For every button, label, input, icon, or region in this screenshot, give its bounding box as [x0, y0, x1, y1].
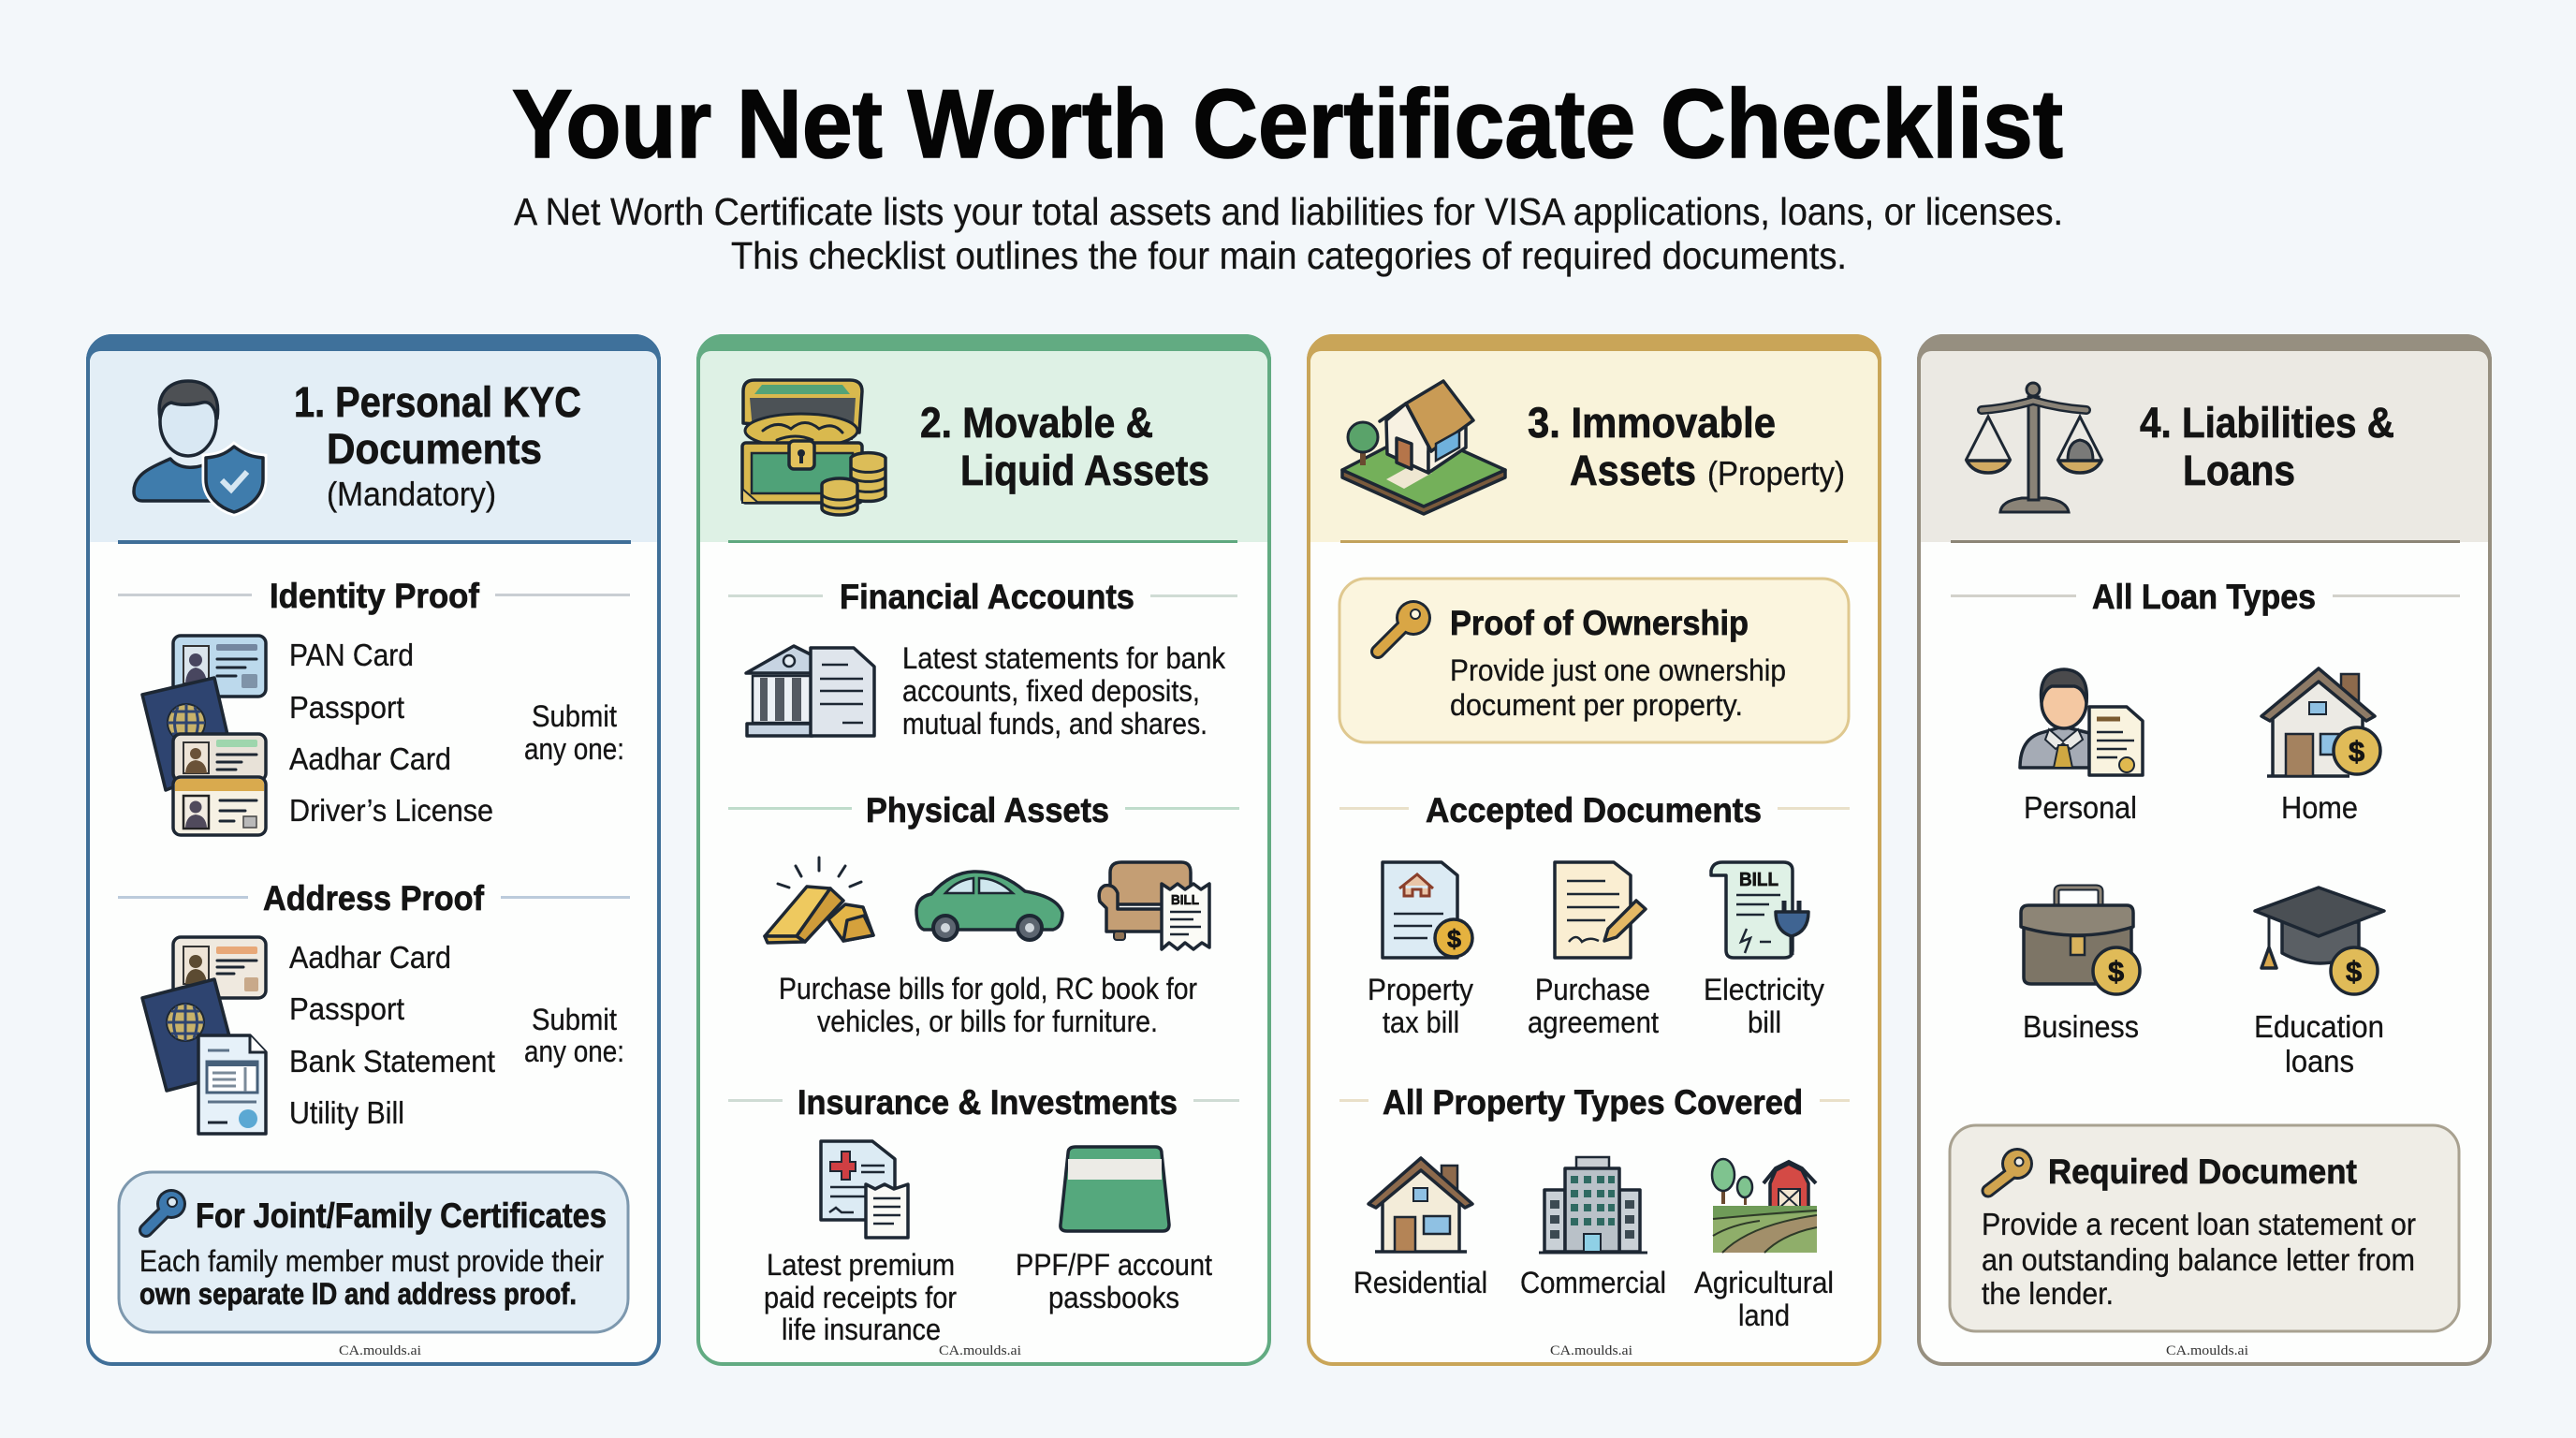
callout: proof of ownership: document per property.: [1450, 688, 1743, 722]
label: land: [1738, 1299, 1790, 1332]
label: Electricity: [1704, 973, 1824, 1006]
label: [1694, 1266, 1834, 1332]
callout: proof of ownership: [1339, 579, 1849, 742]
watermark: CA.moulds.ai: [2166, 1343, 2248, 1358]
heading: [920, 399, 1209, 494]
section heading: Accepted Documents: Accepted Documents: [1426, 791, 1762, 829]
heading: [1528, 399, 1845, 494]
panel: 4. Liabilities and Loans: [1917, 334, 2492, 1364]
watermark: CA.moulds.ai: [1550, 1343, 1632, 1358]
heading: Documents: [327, 425, 542, 473]
callout: proof of ownership: Proof of Ownership: [1450, 604, 1749, 642]
label: agreement: [1528, 1005, 1659, 1039]
icon: business loan: $: [2108, 955, 2124, 988]
icon: education loan: [2255, 888, 2384, 994]
label: Business: [2023, 1009, 2139, 1044]
section heading: All Loan Types: All Loan Types: [2092, 578, 2316, 616]
heading: 2. Movable &: [920, 399, 1153, 447]
label: Personal: [2024, 790, 2137, 825]
icon: blue key: [146, 1189, 186, 1230]
section heading: Identity Proof: Identity Proof: [270, 577, 480, 615]
identity proof list: [289, 638, 493, 828]
address proof list: Passport: [289, 991, 404, 1026]
heading: Assets: [1570, 447, 1696, 494]
label: Home: [2281, 790, 2358, 825]
label: Property: [1368, 973, 1473, 1006]
heading: (Property): [1707, 454, 1845, 492]
address proof list: Bank Statement: [289, 1044, 495, 1078]
insurance label: paid receipts for: [764, 1281, 957, 1314]
icon: agricultural land: [1712, 1159, 1817, 1253]
icon: residential: [1368, 1158, 1472, 1252]
label: loans: [2285, 1044, 2354, 1078]
note: submit any one: Submit: [532, 1003, 617, 1036]
icon: electricity bill: [1711, 862, 1808, 958]
icon: gold bars: [765, 858, 873, 943]
icon: electricity bill: BILL: [1739, 870, 1778, 890]
callout: required document: an outstanding balance letter from: [1982, 1242, 2415, 1277]
label: Commercial: [1520, 1266, 1666, 1299]
label: Education: [2254, 1009, 2384, 1044]
heading: [2140, 399, 2394, 494]
callout: required document: Provide a recent loan statement or: [1982, 1207, 2416, 1241]
physical assets description: [779, 972, 1197, 1038]
section heading: Financial Accounts: Financial Accounts: [840, 578, 1134, 616]
callout: required document: [1950, 1125, 2459, 1331]
icon: purchase agreement: [1555, 862, 1646, 958]
panel: 1. Personal KYC Documents: [86, 334, 661, 1364]
passbook label: passbooks: [1048, 1281, 1179, 1314]
icon: personal loan: [2020, 669, 2143, 775]
identity proof list: PAN Card: [289, 638, 414, 672]
address proof list: Aadhar Card: [289, 940, 451, 975]
icon: sofa with bill: BILL: [1171, 892, 1199, 908]
icon: person with shield: [134, 381, 263, 512]
section heading: Insurance and Investments: Insurance & Investments: [798, 1083, 1178, 1122]
icon: property tax bill: [1383, 862, 1472, 958]
passbook label: PPF/PF account: [1016, 1248, 1212, 1282]
address proof list: Utility Bill: [289, 1095, 404, 1130]
icon: home loan: [2261, 668, 2380, 776]
icon: identity documents: [142, 636, 266, 835]
note: submit any one: [524, 699, 624, 766]
panel: 2. Movable and Liquid Assets: [696, 334, 1271, 1364]
label: [2254, 1009, 2384, 1078]
note: submit any one: any one:: [524, 732, 624, 766]
section heading: Address Proof: Address Proof: [263, 879, 485, 917]
physical assets description: Purchase bills for gold, RC book for: [779, 972, 1197, 1005]
identity proof list: Aadhar Card: [289, 741, 451, 776]
heading: (Mandatory): [327, 475, 496, 513]
label: tax bill: [1383, 1005, 1459, 1039]
icon: property tax bill: $: [1447, 925, 1461, 953]
insurance label: [764, 1248, 957, 1346]
subtitle: A Net Worth Certificate lists your total assets and liabilities for VISA applications, loans, or licenses.: [514, 190, 2063, 233]
identity proof list: Driver’s License: [289, 793, 493, 828]
callout: required document: the lender.: [1982, 1276, 2114, 1311]
label: [1528, 973, 1659, 1039]
callout: joint family certificates: [119, 1172, 628, 1332]
insurance label: life insurance: [782, 1313, 941, 1346]
insurance label: Latest premium: [767, 1248, 955, 1282]
icon: address documents: [142, 937, 266, 1134]
financial accounts description: mutual funds, and shares.: [902, 707, 1208, 741]
icon: gold key: [1988, 1148, 2033, 1191]
heading: Liquid Assets: [960, 447, 1209, 494]
section heading: All Property Types Covered: All Property Types Covered: [1383, 1083, 1803, 1122]
label: [1368, 973, 1473, 1039]
icon: education loan: $: [2346, 955, 2362, 988]
icon: home loan: $: [2349, 735, 2364, 768]
label: Agricultural: [1694, 1266, 1834, 1299]
icon: business loan: [2021, 888, 2140, 994]
financial accounts description: [902, 641, 1226, 741]
label: Residential: [1354, 1266, 1487, 1299]
address proof list: [289, 940, 495, 1130]
physical assets description: vehicles, or bills for furniture.: [817, 1005, 1158, 1038]
heading: 4. Liabilities &: [2140, 399, 2394, 447]
icon: car: [916, 872, 1062, 940]
icon: passbook: [1061, 1147, 1169, 1231]
passbook label: [1016, 1248, 1212, 1314]
note: submit any one: any one:: [524, 1034, 624, 1068]
label: bill: [1748, 1005, 1781, 1039]
icon: insurance documents: [821, 1141, 908, 1238]
callout: proof of ownership: Provide just one ownership: [1450, 653, 1786, 687]
panel: 3. Immovable Assets: [1307, 334, 1881, 1364]
icon: bank and statement: [746, 646, 874, 736]
callout: joint family certificates: For Joint/Family Certificates: [196, 1196, 607, 1235]
callout: joint family certificates: own separate ID and address proof.: [139, 1277, 577, 1311]
callout: joint family certificates: Each family member must provide their: [139, 1244, 604, 1278]
label: [1704, 973, 1824, 1039]
financial accounts description: Latest statements for bank: [902, 641, 1226, 675]
heading: 3. Immovable: [1528, 399, 1776, 447]
identity proof list: Passport: [289, 690, 404, 725]
icon: gold key: [1378, 600, 1431, 652]
label: Purchase: [1535, 973, 1650, 1006]
financial accounts description: accounts, fixed deposits,: [902, 674, 1200, 708]
icon: treasure chest: [742, 380, 886, 515]
heading: 1. Personal KYC: [294, 378, 581, 426]
note: submit any one: [524, 1003, 624, 1068]
subtitle: [514, 190, 2063, 277]
heading: Loans: [2183, 447, 2295, 494]
icon: house on land: [1342, 381, 1505, 514]
heading: [294, 378, 581, 513]
watermark: CA.moulds.ai: [939, 1343, 1021, 1358]
icon: balance scales: [1966, 383, 2102, 512]
title: Your Net Worth Certificate Checklist: [512, 70, 2063, 179]
note: submit any one: Submit: [532, 699, 617, 733]
icon: sofa with bill: [1099, 862, 1209, 949]
callout: required document: Required Document: [2048, 1152, 2357, 1191]
watermark: CA.moulds.ai: [339, 1343, 421, 1358]
subtitle: This checklist outlines the four main categories of required documents.: [731, 234, 1847, 277]
icon: commercial building: [1539, 1157, 1647, 1253]
section heading: Physical Assets: Physical Assets: [866, 791, 1109, 829]
